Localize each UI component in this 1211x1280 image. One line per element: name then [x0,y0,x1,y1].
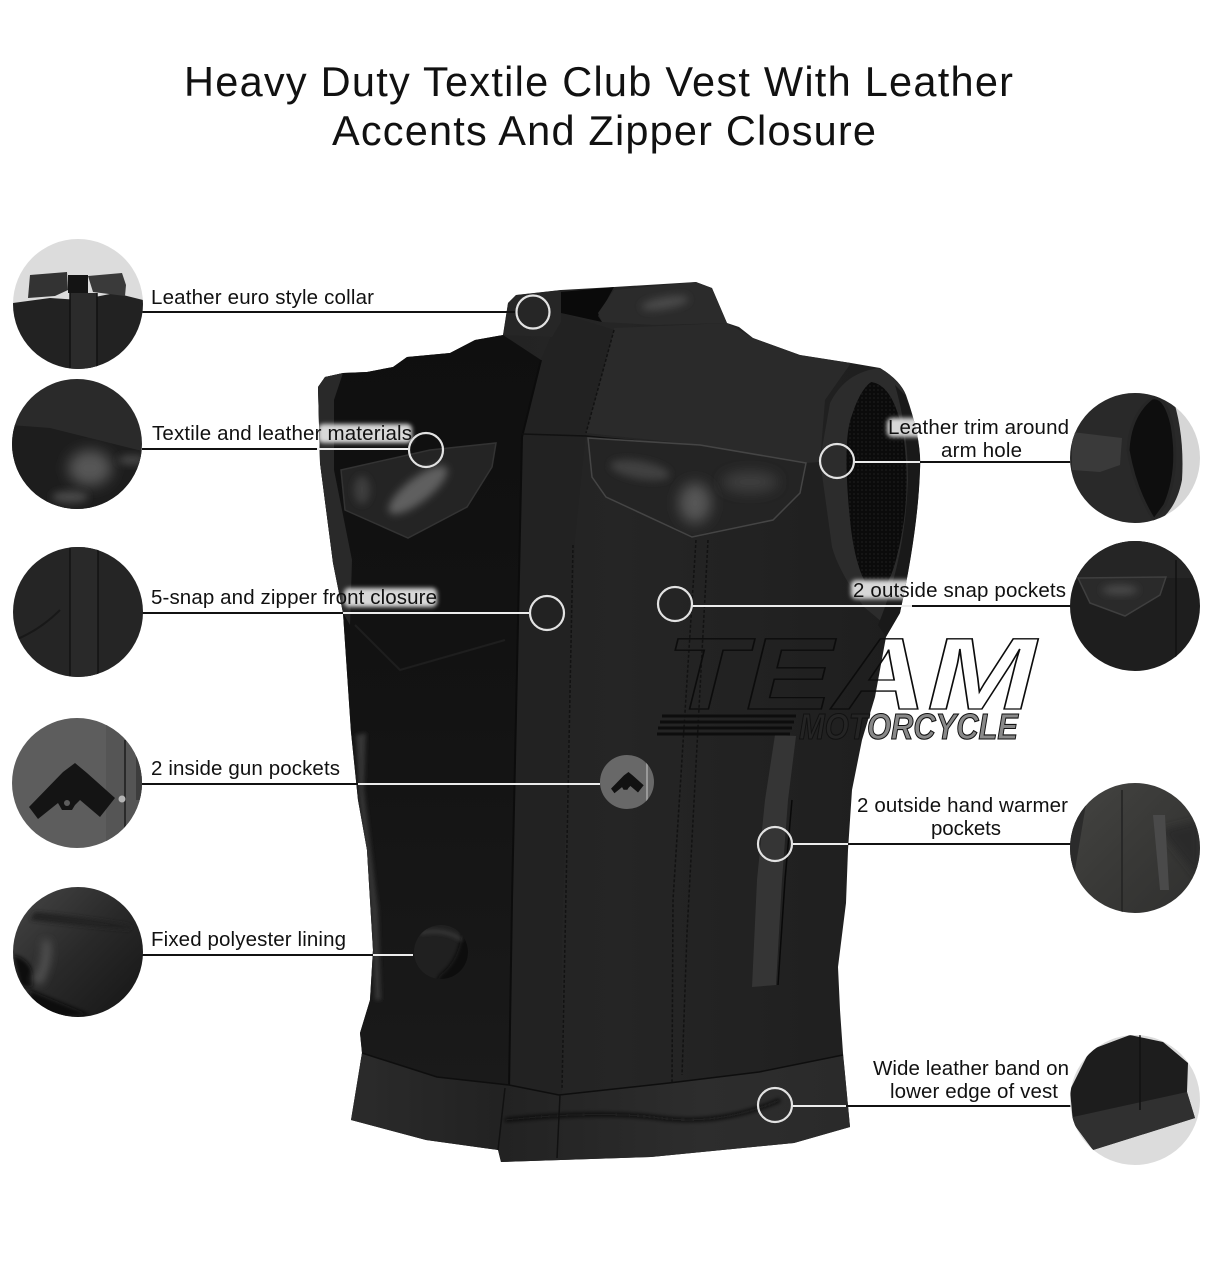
vest base fabric [300,270,940,1170]
label: band [873,1057,1069,1103]
vest illustration [300,270,940,1170]
label: collar: Leather euro style collar [151,286,374,309]
stitch lines [562,330,708,1090]
halo: leather [887,418,927,437]
hotspot: inside gun pocket [600,755,654,809]
thumbnail: gun pocket [10,716,146,852]
placket edges [509,360,541,1090]
label: hand warmer: 2 outside hand warmer [857,794,1068,817]
label: snap pockets: 2 outside snap pockets [853,579,1066,602]
left side leather strip [356,733,381,1000]
band creases [505,1100,780,1120]
left arm trim [318,373,352,625]
yoke [727,323,850,462]
halo: front closure [344,588,437,607]
label: materials: Textile and leather materials [152,422,412,445]
thumbnail: materials [10,376,146,512]
label: arm hole [888,416,1069,462]
label: band: Wide leather band on [873,1057,1069,1080]
label: hand warmer: pockets [931,817,1001,840]
label: lining: Fixed polyester lining [151,928,346,951]
hotspot: polyester lining [414,925,468,978]
label: closure: 5-snap and zipper front closure [151,586,437,609]
title: Heavy Duty Textile Club Vest With Leather [184,58,1013,105]
icon: small pistol [611,772,644,793]
right flap shine [609,456,778,523]
collar right leather [598,282,727,325]
halo: materials [318,424,412,443]
pocket slit [778,800,792,985]
icon: pistol [29,763,115,819]
left flap shine [352,462,450,518]
left flap [341,443,496,538]
thumbnail: snap pocket [1068,538,1204,674]
halo: snap pockets [851,580,921,599]
left chevron seam [355,625,505,670]
collar shine [642,294,688,312]
watermark: Team Motorcycle: MOTORCYCLE [799,706,1019,747]
thumbnail: band [1068,1032,1204,1168]
label: arm hole: arm hole [941,439,1022,462]
thumbnail: hand warmer [1068,780,1204,916]
callout lines [142,312,1073,1106]
watermark: Team Motorcycle: TEAM [666,617,1039,731]
hand warmer pocket [752,735,796,987]
label: band: lower edge of vest [890,1080,1058,1103]
left front panel [300,335,541,1095]
hotspot rings [409,296,854,1122]
waist band [349,1053,852,1165]
label: arm hole: Leather trim around [888,416,1069,439]
outer arm edge [878,385,920,637]
right flap [588,438,806,537]
armhole back lining [820,368,919,622]
armhole mesh [846,382,907,592]
collar inner [561,287,614,322]
title [184,58,1013,154]
thumbnail: lining [10,884,146,1020]
placket [611,334,613,340]
title: Accents And Zipper Closure [332,107,876,154]
thumbnail: closure [10,544,146,680]
label: hand warmer [857,794,1068,840]
label: gun pockets: 2 inside gun pockets [151,757,340,780]
collar left [503,290,561,337]
thumbnail: arm hole [1068,390,1204,526]
watermark: Team Motorcycle [657,617,1039,747]
thumbnail: collar [10,236,146,372]
band edge [362,1053,843,1095]
band overlap seam [498,1088,560,1158]
